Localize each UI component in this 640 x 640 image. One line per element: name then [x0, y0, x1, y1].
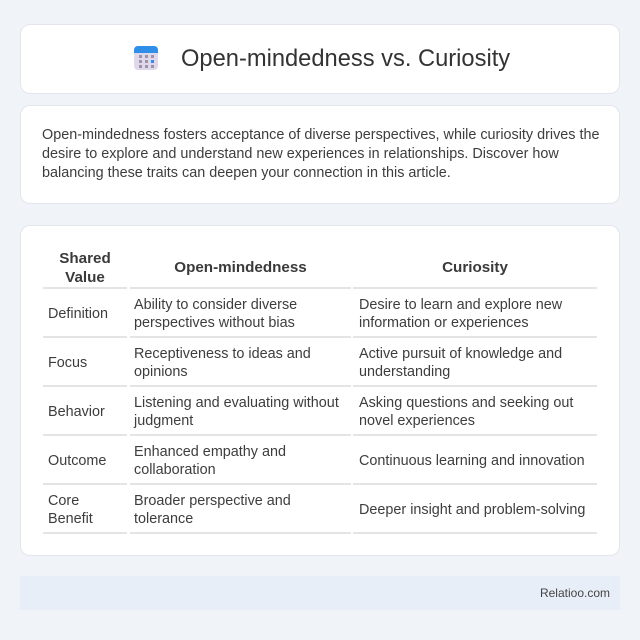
focus: open-mindedness	[134, 346, 311, 380]
row: outcome: Outcome	[48, 453, 106, 469]
intro paragraph: desire to explore and understand new experiences in relationships. Discover how	[42, 146, 559, 162]
focus: curiosity	[359, 346, 562, 380]
core benefit: open-mindedness	[134, 493, 291, 527]
behavior: curiosity: Asking questions and seeking out	[359, 395, 573, 411]
table header: shared value: Value	[65, 269, 105, 286]
row: focus: Focus	[48, 355, 87, 371]
outcome: curiosity: Continuous learning and innovation	[359, 453, 585, 469]
row: core benefit: Core	[48, 493, 79, 509]
behavior: curiosity	[359, 395, 574, 429]
core benefit: open-mindedness: tolerance	[134, 511, 193, 527]
definition: curiosity: information or experiences	[359, 315, 529, 331]
behavior: open-mindedness	[134, 395, 339, 429]
intro text card	[20, 105, 620, 204]
focus: open-mindedness: opinions	[134, 364, 188, 380]
table header: curiosity: Curiosity	[442, 259, 508, 276]
core benefit: curiosity: Deeper insight and problem-solving	[359, 502, 585, 518]
footer text: Relatioo.com	[540, 586, 610, 600]
focus: curiosity: Active pursuit of knowledge and	[359, 346, 562, 362]
row: behavior: Behavior	[48, 404, 105, 420]
intro paragraph	[42, 127, 600, 181]
icon: calendar	[134, 46, 158, 70]
core benefit: open-mindedness: Broader perspective and	[134, 493, 291, 509]
header card	[20, 24, 620, 94]
behavior: open-mindedness: Listening and evaluating without	[134, 395, 339, 411]
outcome: open-mindedness	[134, 444, 286, 478]
intro paragraph: balancing these traits can deepen your connection in this article.	[42, 165, 451, 181]
definition: open-mindedness: Ability to consider diverse	[134, 297, 297, 313]
focus: curiosity: understanding	[359, 364, 450, 380]
definition: open-mindedness: perspectives without bias	[134, 315, 295, 331]
row: core benefit: Benefit	[48, 511, 93, 527]
table header: shared value	[59, 250, 111, 286]
table header: shared value: Shared	[59, 250, 111, 267]
title: Open-mindedness vs. Curiosity	[181, 46, 510, 72]
comparison table card	[20, 225, 620, 556]
table header: open-mindedness: Open-mindedness	[174, 259, 307, 276]
footer bar	[20, 576, 620, 610]
row: core benefit	[48, 493, 93, 527]
row: definition: Definition	[48, 306, 108, 322]
focus: open-mindedness: Receptiveness to ideas and	[134, 346, 311, 362]
behavior: open-mindedness: judgment	[134, 413, 193, 429]
definition: curiosity: Desire to learn and explore new	[359, 297, 562, 313]
outcome: open-mindedness: Enhanced empathy and	[134, 444, 286, 460]
behavior: curiosity: novel experiences	[359, 413, 475, 429]
intro paragraph: Open-mindedness fosters acceptance of diverse perspectives, while curiosity drives the	[42, 127, 600, 143]
definition: curiosity	[359, 297, 562, 331]
outcome: open-mindedness: collaboration	[134, 462, 216, 478]
definition: open-mindedness	[134, 297, 297, 331]
